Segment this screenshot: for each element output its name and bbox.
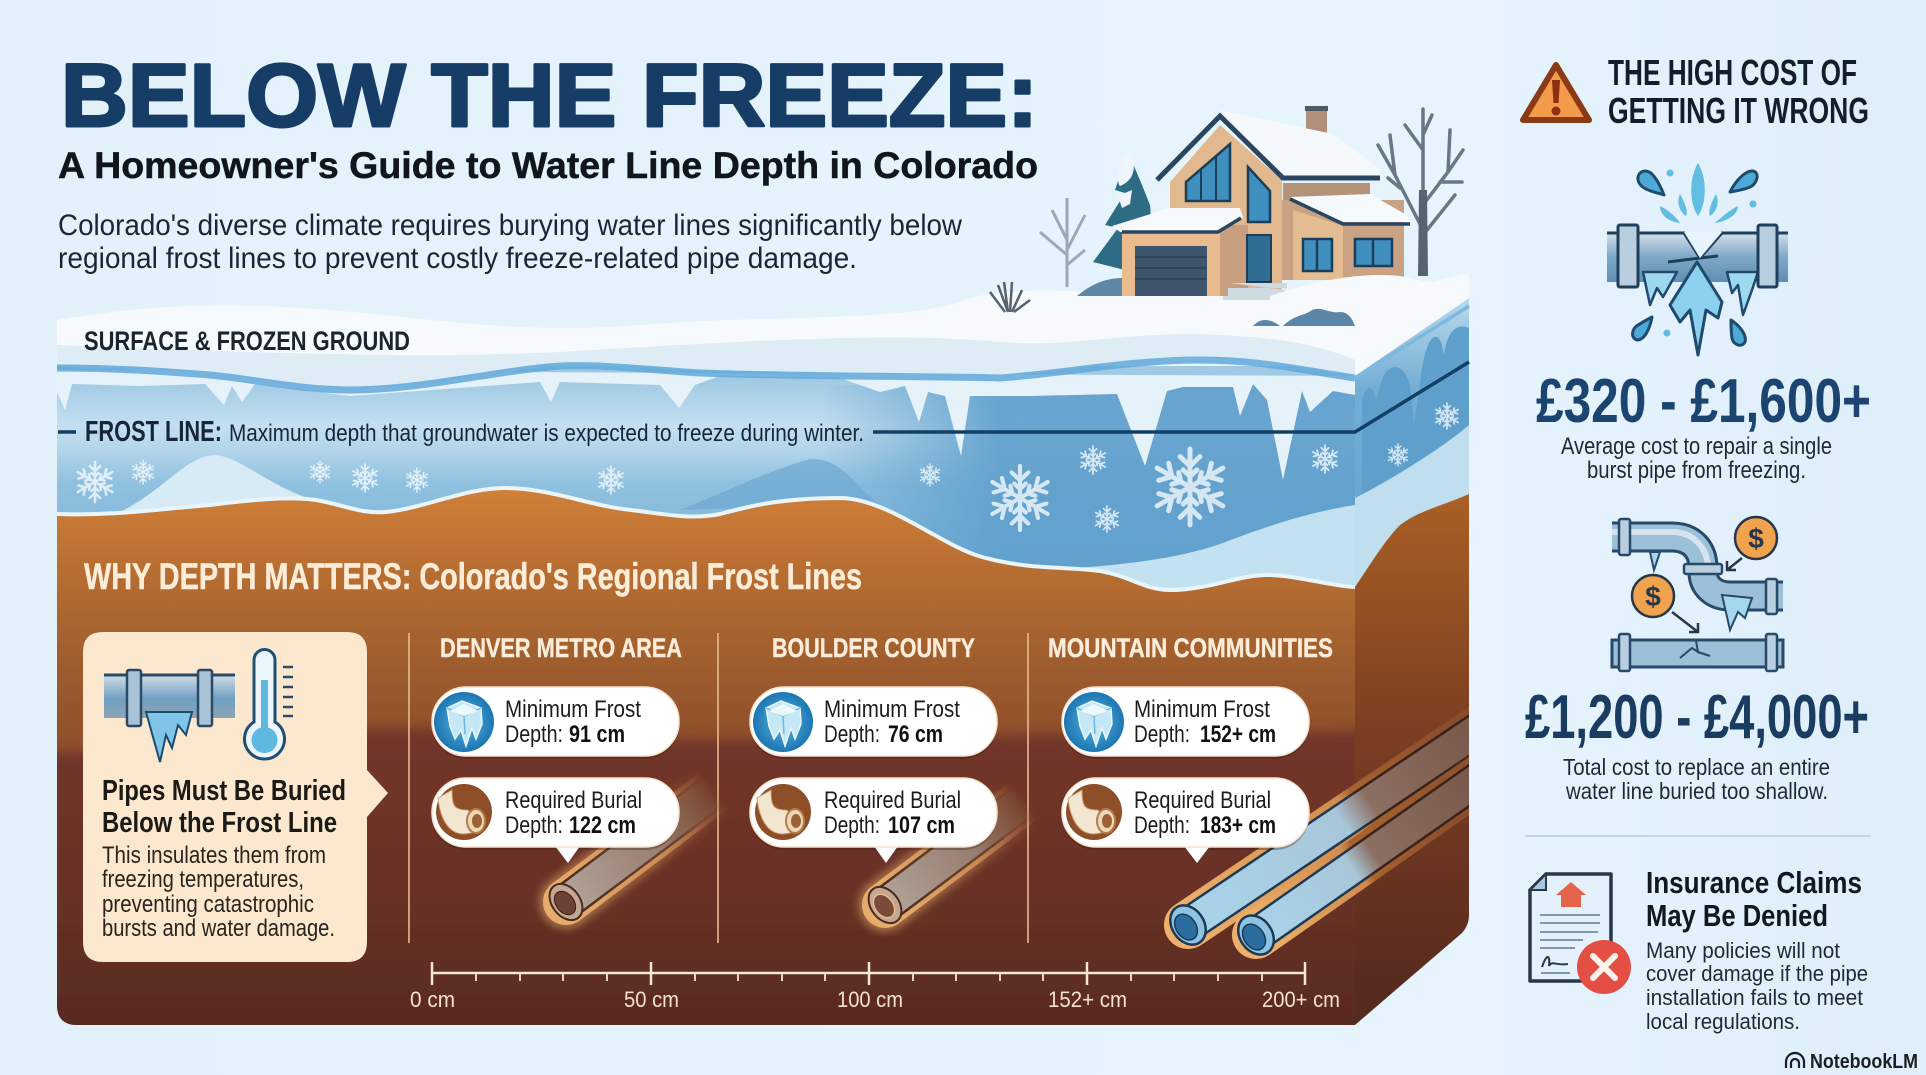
Mountain burial pill: Required Burial	[1134, 787, 1271, 814]
surface label: SURFACE & FROZEN GROUND	[84, 326, 410, 356]
intro text: Colorado's diverse climate requires burying water lines significantly below	[58, 209, 962, 242]
snow surface	[57, 272, 1469, 388]
main wall	[1170, 125, 1282, 294]
arrows	[1672, 558, 1742, 632]
right tree	[1378, 109, 1463, 235]
column heading: Mountain: MOUNTAIN COMMUNITIES	[1048, 633, 1333, 663]
Denver frost pill: Minimum Frost	[505, 696, 641, 723]
right tree trunk	[1418, 190, 1428, 276]
pine tree	[1093, 152, 1155, 270]
insurance body: cover damage if the pipe	[1646, 961, 1868, 986]
right lower wall	[1283, 183, 1370, 200]
left tree	[1040, 198, 1085, 287]
card heading: Below the Frost Line	[102, 807, 337, 839]
column heading: Denver: DENVER METRO AREA	[440, 633, 682, 663]
steps	[1223, 283, 1287, 300]
icon: denied document	[1530, 874, 1631, 994]
coin top	[1735, 517, 1777, 559]
insurance heading: May Be Denied	[1646, 898, 1828, 933]
side windows	[1303, 239, 1392, 271]
Boulder burial pill: Required Burial	[824, 787, 961, 814]
insurance body: Many policies will not	[1646, 938, 1840, 963]
card body: bursts and water damage.	[102, 915, 335, 942]
column heading: Boulder: BOULDER COUNTY	[772, 633, 975, 663]
card body: This insulates them from	[102, 842, 326, 869]
Mountain burial pill: Depth:	[1134, 812, 1190, 839]
icon: pipes and money: $	[1748, 523, 1764, 554]
cost 1 description: Average cost to repair a single	[1561, 433, 1832, 460]
insurance body: local regulations.	[1646, 1009, 1800, 1034]
intro text	[58, 209, 962, 275]
Denver frost pill: 91 cm	[569, 721, 625, 748]
side ice face	[1355, 298, 1469, 590]
depth scale: 152+ cm	[1048, 987, 1127, 1012]
card heading	[102, 775, 346, 839]
rocks	[1253, 309, 1355, 326]
intro text: regional frost lines to prevent costly freeze-related pipe damage.	[58, 242, 857, 275]
frost line	[58, 362, 1469, 448]
column dividers	[409, 633, 1028, 943]
Denver burial pill: 122 cm	[569, 812, 636, 839]
Boulder burial pill: 107 cm	[888, 812, 955, 839]
house scene	[990, 106, 1463, 326]
snow mound	[1270, 275, 1440, 300]
Boulder frost pill: Depth:	[824, 721, 880, 748]
title: BELOW THE FREEZE:	[61, 45, 1038, 145]
Mountain burial pill: 183+ cm	[1200, 812, 1276, 839]
cross-section ground block	[20, 272, 1469, 1060]
lower roof snow	[1290, 194, 1410, 222]
cost 2 description	[1563, 754, 1830, 804]
soil front	[57, 488, 1355, 1025]
pipes: Mountain	[1163, 715, 1500, 961]
garage block	[1122, 232, 1220, 296]
Boulder frost pill	[750, 687, 997, 759]
ice layer front	[57, 366, 1355, 600]
card background	[83, 632, 388, 962]
water spray	[1660, 163, 1756, 336]
deep soil	[57, 724, 1355, 1025]
Boulder frost pill: 76 cm	[888, 721, 943, 748]
door	[1247, 235, 1271, 282]
icon: pipes and money	[1612, 517, 1783, 671]
insurance heading: Insurance Claims	[1646, 865, 1862, 900]
cost heading	[1608, 52, 1869, 131]
rock left	[1077, 278, 1122, 296]
soil rim	[57, 488, 1355, 590]
Boulder burial pill	[750, 778, 997, 863]
Denver burial pill: Depth:	[505, 812, 563, 839]
Denver burial pill: Required Burial	[505, 787, 642, 814]
insurance heading	[1646, 865, 1862, 933]
snowflakes	[75, 403, 1460, 532]
frost line: FROST LINE:	[85, 416, 222, 448]
side ice band	[1355, 306, 1469, 378]
icicles	[57, 370, 1355, 480]
card body: preventing catastrophic	[102, 891, 314, 918]
depth scale	[410, 962, 1340, 1012]
depth scale: 0 cm	[410, 987, 455, 1012]
frost line: Maximum depth that groundwater is expected to freeze during winter.	[229, 420, 864, 447]
cost 1 description: burst pipe from freezing.	[1587, 457, 1806, 484]
Mountain frost pill	[1062, 687, 1309, 759]
soil side face	[1355, 494, 1469, 1025]
Mountain burial pill	[1062, 778, 1309, 863]
depth scale: 50 cm	[624, 987, 679, 1012]
pipe body	[1607, 232, 1788, 282]
Denver frost pill: Depth:	[505, 721, 563, 748]
ice mound centre	[680, 459, 880, 510]
panel: high cost	[1523, 52, 1871, 1034]
insurance body: installation fails to meet	[1646, 985, 1863, 1010]
main roof snow	[1220, 110, 1380, 178]
pale ice lens	[960, 505, 1355, 600]
Mountain frost pill: Depth:	[1134, 721, 1190, 748]
Boulder frost pill: Minimum Frost	[824, 696, 960, 723]
icon: warning triangle	[1523, 65, 1589, 120]
blue ice band	[57, 360, 1355, 390]
snow shading	[57, 334, 1355, 388]
panel: pipes must be buried card	[83, 632, 388, 962]
section heading: WHY DEPTH MATTERS: Colorado's Regional Frost Lines	[84, 556, 862, 597]
card body	[102, 842, 335, 942]
depth scale: 200+ cm	[1262, 987, 1340, 1012]
pipe: Boulder	[862, 800, 1025, 929]
ice shard	[1670, 262, 1722, 355]
pine snow	[1118, 148, 1134, 208]
subtitle: A Homeowner's Guide to Water Line Depth in Colorado	[58, 145, 1038, 186]
flanges	[1618, 225, 1638, 287]
roof dark edges	[1157, 116, 1380, 180]
shrub	[990, 282, 1030, 312]
icon: pipes and money: $	[1645, 581, 1661, 612]
Mountain frost pill: 152+ cm	[1200, 721, 1276, 748]
tall window	[1248, 167, 1270, 222]
Denver frost pill	[432, 687, 679, 759]
gable window	[1186, 144, 1230, 201]
cost 2 description: Total cost to replace an entire	[1563, 754, 1830, 780]
cost 2 description: water line buried too shallow.	[1565, 778, 1828, 804]
side ice arches	[1362, 326, 1469, 505]
depth scale: 100 cm	[837, 987, 903, 1012]
Boulder burial pill: Depth:	[824, 812, 880, 839]
coin bottom	[1632, 575, 1674, 617]
droplets	[1633, 171, 1757, 345]
icon: thermometer	[245, 650, 293, 759]
side pale ice	[1355, 425, 1469, 590]
darker ice right	[820, 385, 1355, 575]
icon: burst pipe	[1607, 163, 1788, 355]
card body: freezing temperatures,	[102, 866, 304, 893]
icon: frozen pipe	[104, 670, 235, 762]
pipe: Denver	[543, 790, 715, 926]
card heading: Pipes Must Be Buried	[102, 775, 346, 807]
chimney	[1306, 107, 1327, 139]
Denver burial pill	[432, 778, 679, 863]
insurance body	[1646, 938, 1868, 1034]
Mountain frost pill: Minimum Frost	[1134, 696, 1270, 723]
garage roof snow	[1112, 208, 1243, 232]
cost 1 description	[1561, 433, 1832, 484]
ice mound left	[120, 455, 330, 512]
garage door	[1135, 246, 1207, 296]
